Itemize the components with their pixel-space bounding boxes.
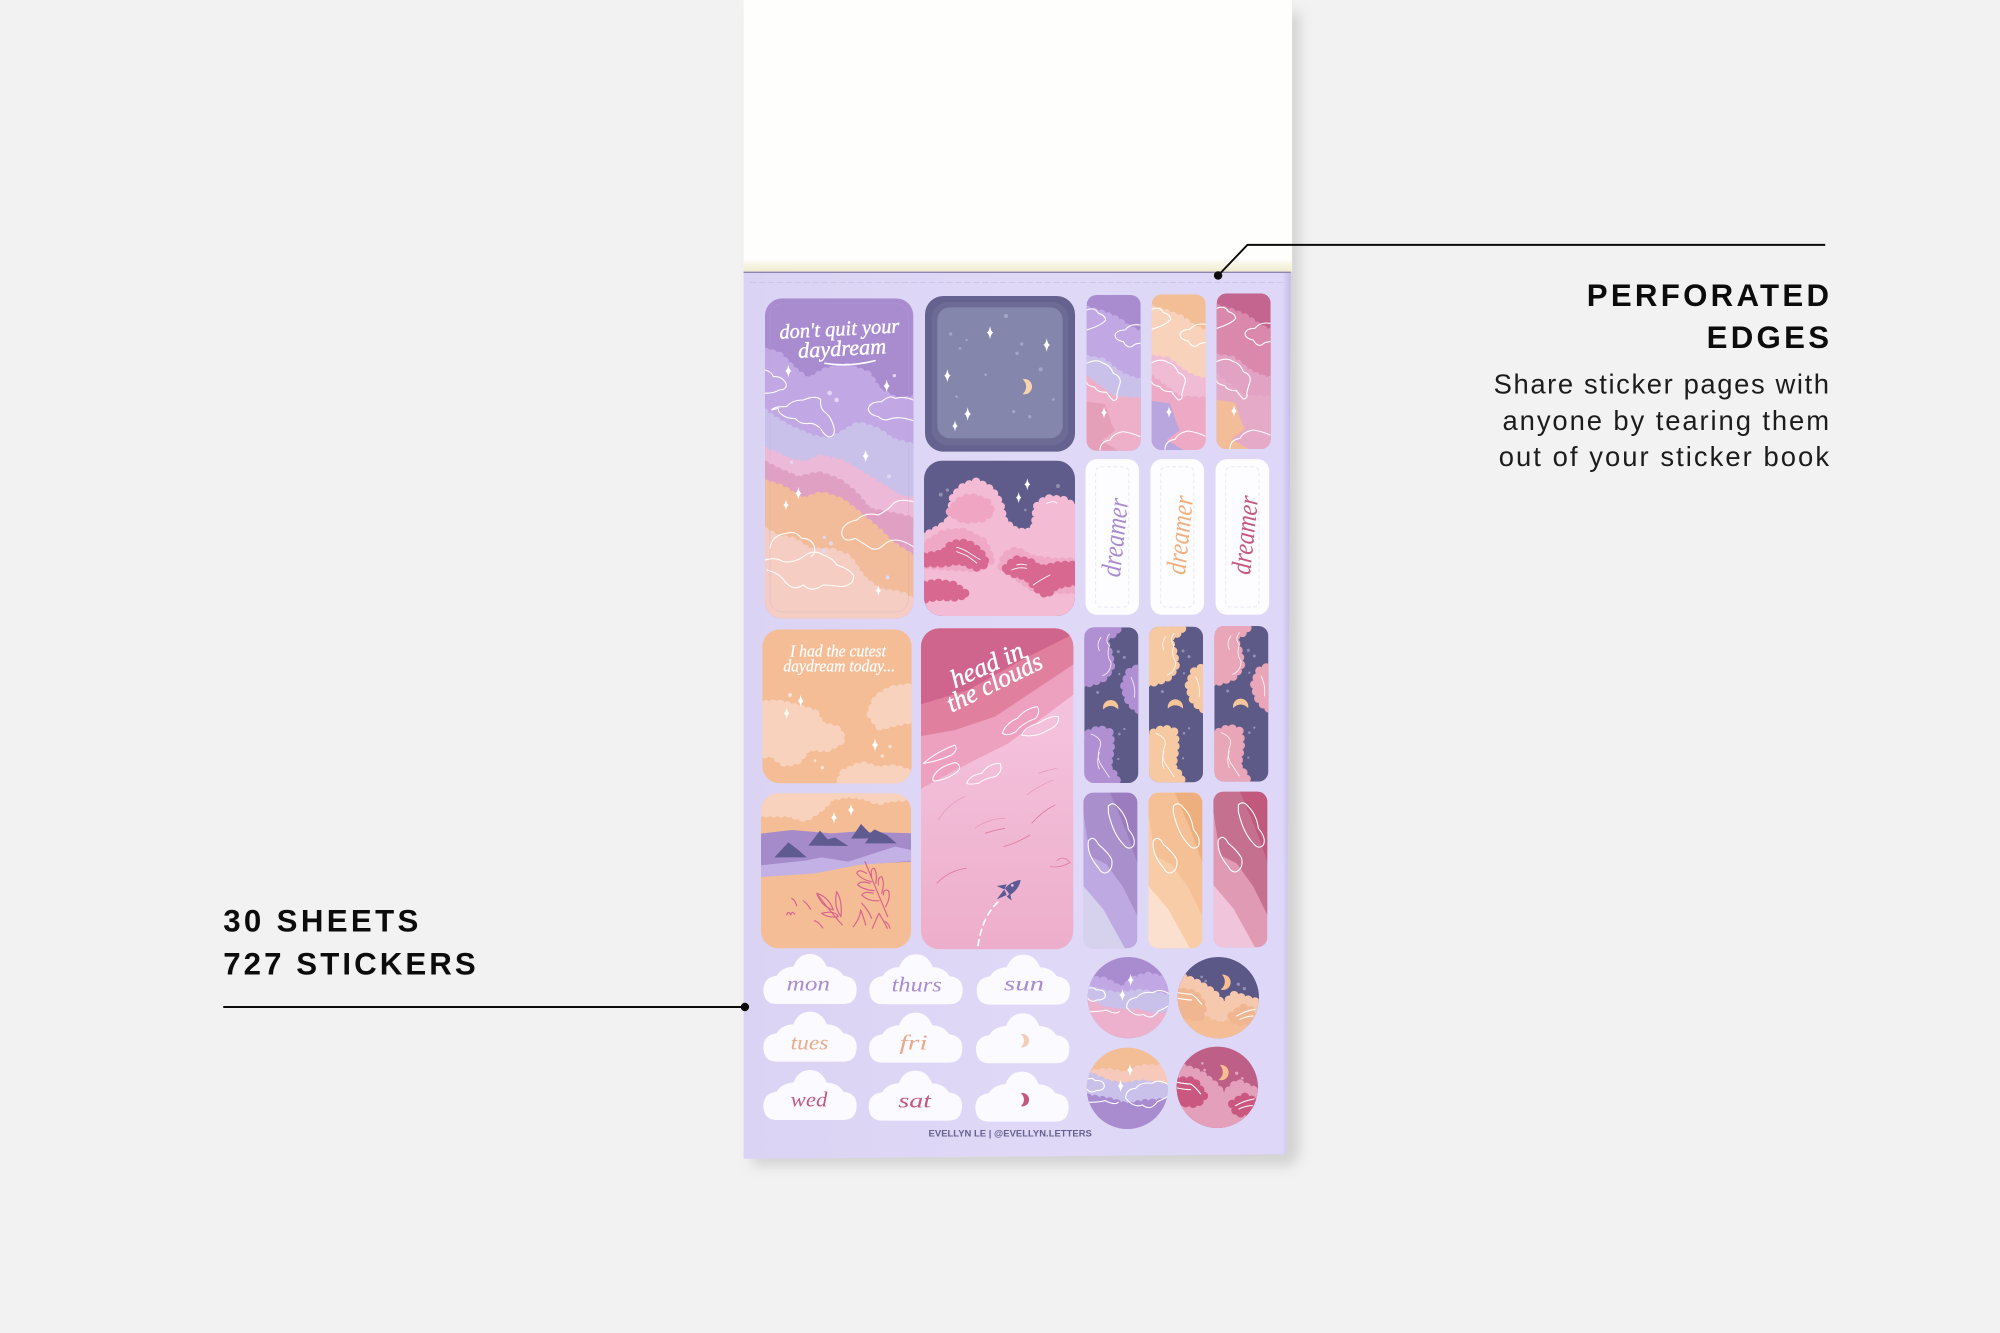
book shadow: [753, 13, 1300, 1166]
cloud: wed: [763, 1070, 857, 1120]
sticker text: cutest daydream: [783, 642, 895, 676]
leader line: [1214, 245, 1825, 280]
stickers: starry night square and pink clouds: [920, 296, 1080, 620]
cloud: peach moon: [976, 1013, 1069, 1063]
sticker: dreamer peach: [1151, 459, 1204, 615]
strip: diagonal rose: [1213, 792, 1267, 947]
description: Share sticker pages with: [1494, 368, 1829, 399]
cloud: sat: [869, 1071, 962, 1121]
sticker text: cutest daydream: I had the cutest: [789, 642, 886, 661]
description: out of your sticker book: [1499, 441, 1829, 472]
heading: EDGES: [1707, 320, 1829, 355]
sticker: pink clouds at night: [920, 461, 1080, 620]
strip: rose: [1216, 293, 1271, 449]
sticker: starry night square: [925, 296, 1075, 452]
cloud: tues: tues: [791, 1030, 828, 1054]
icon: rocket: [997, 880, 1021, 901]
cloud: rose moon: [975, 1072, 1069, 1122]
sheet credit: EVELLYN LE | @EVELLYN.LETTERS: [929, 1127, 1092, 1138]
heading: [223, 904, 476, 981]
lavender sticker sheet: [744, 272, 1291, 1159]
cloud: mon: [763, 954, 857, 1004]
stickers: cutest daydream, mountain lake, head in the clouds: [758, 620, 1075, 949]
strip: night clouds purple: [1084, 627, 1138, 783]
cloud: sun: [977, 955, 1070, 1005]
cloud: fri: fri: [899, 1030, 928, 1054]
sticker text: don't quit your daydream: [779, 315, 901, 363]
cloud: fri: [869, 1013, 962, 1063]
round stickers: [1081, 956, 1265, 1135]
description: [1494, 368, 1829, 472]
leader line: [223, 1003, 749, 1011]
sticker text: cutest daydream: daydream today...: [783, 657, 895, 676]
round sticker: peach to purple: [1086, 1048, 1168, 1129]
sticker: don't quit your daydream: [758, 298, 918, 625]
heading: [1587, 278, 1829, 355]
round sticker: peach night: [1178, 957, 1259, 1038]
heading: 30 SHEETS: [223, 904, 418, 939]
sticker text: head in the clouds: the clouds: [942, 647, 1047, 718]
sticker book: [744, 0, 1300, 1166]
sticker: cutest daydream: [758, 629, 915, 787]
strip: purple: [1086, 295, 1141, 451]
cloud: sun: sun: [1004, 972, 1044, 996]
sticker text: don't quit your daydream: don't quit your: [779, 315, 901, 344]
cloud: thurs: thurs: [892, 973, 942, 997]
sticker text: don't quit your daydream: daydream: [797, 333, 887, 363]
sticker text: head in the clouds: head in: [946, 636, 1028, 694]
round sticker: purple clouds: [1088, 957, 1169, 1038]
callout: 30 sheets 727 stickers: [223, 904, 749, 1011]
strip: night clouds peach: [1149, 626, 1203, 782]
strip: peach: [1152, 294, 1206, 450]
cloud: mon: mon: [787, 972, 830, 996]
strip: diagonal peach: [1148, 793, 1202, 948]
sticker: dreamer rose: [1216, 459, 1269, 615]
sticker: mountain lake: [758, 790, 915, 948]
sticker: dreamer peach: dreamer: [1161, 494, 1200, 576]
heading: 727 STICKERS: [223, 946, 476, 981]
cloud: sat: sat: [898, 1089, 932, 1113]
sticker: dreamer purple: dreamer: [1096, 497, 1135, 579]
flipped blank page: [744, 0, 1292, 272]
sticker: dreamer rose: dreamer: [1226, 494, 1265, 576]
sticker strips: night clouds and diagonal: [1081, 623, 1273, 948]
cloud: wed: wed: [791, 1088, 828, 1112]
description: anyone by tearing them: [1503, 405, 1829, 436]
round sticker: rose night: [1176, 1046, 1258, 1128]
sticker strips: sunset clouds: [1086, 293, 1271, 451]
sticker: dreamer purple: [1085, 459, 1139, 615]
cloud stickers: days of the week: [763, 954, 1070, 1122]
cloud: tues: [763, 1012, 857, 1062]
callout: perforated edges: [1214, 245, 1829, 472]
sticker: head in the clouds: [918, 620, 1075, 949]
strip: night clouds pink: [1214, 626, 1268, 782]
heading: PERFORATED: [1587, 278, 1829, 313]
cloud: thurs: [869, 954, 963, 1004]
strip: diagonal purple: [1083, 793, 1137, 948]
